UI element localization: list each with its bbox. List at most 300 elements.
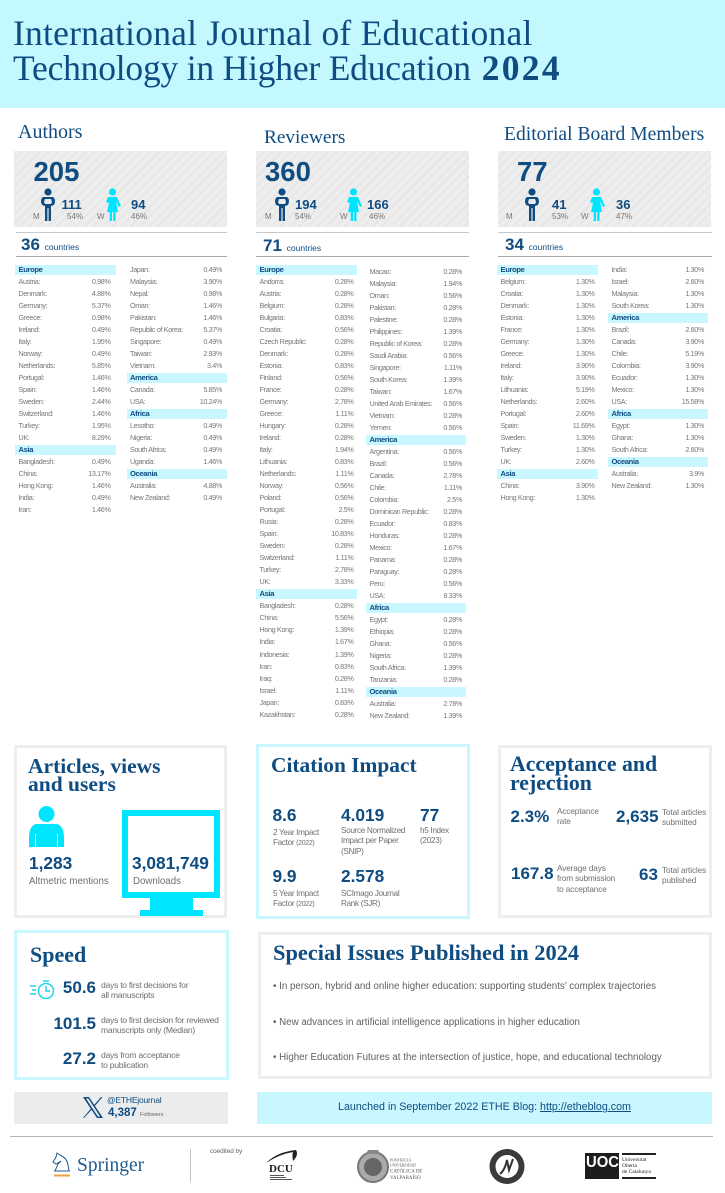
table: authors countries, column 2: 1.46% [203, 313, 222, 322]
days to acceptance label [557, 864, 615, 894]
articles published figure: 63 [639, 864, 658, 884]
table: authors countries, column 1: 8.29% [92, 433, 110, 442]
table: reviewers countries, column 1: 0.28% [335, 301, 354, 310]
table: editorial board countries, column 1: 1.30% [576, 313, 594, 322]
table: reviewers countries, column 2: 1.94% [443, 279, 462, 288]
table: editorial board countries, column 2: 15.58% [682, 397, 704, 406]
heading: editorial board members: Editorial Board Members [504, 124, 704, 145]
table: reviewers countries, column 1: Spain: [260, 529, 278, 538]
table: authors countries, column 2: Oceania [130, 469, 157, 478]
table: reviewers countries, column 2: 0.28% [443, 651, 462, 660]
icon: springer horse [52, 1152, 70, 1176]
snip label: (SNIP) [341, 847, 364, 856]
articles submitted label: Total articles [662, 808, 706, 817]
table: authors countries, column 1: Switzerland: [18, 409, 53, 418]
table: authors countries, column 1: China: [18, 469, 37, 478]
table: reviewers countries, column 2: Yemen: [370, 423, 392, 432]
icon: man [41, 188, 55, 221]
table: editorial board countries, column 1: Greece: [500, 349, 524, 358]
days to acceptance label: from submission [557, 874, 615, 883]
table: authors countries, column 2: Oman: [130, 301, 150, 310]
table: reviewers countries, column 2: Chile: [370, 483, 386, 492]
table: editorial board countries, column 1: 1.30% [576, 289, 594, 298]
table: reviewers countries, column 1: India: [260, 637, 275, 646]
table: reviewers countries, column 2: 0.56% [443, 459, 462, 468]
logo: pontificia universidad catolica de valparaiso: CATÓLICA DE [390, 1168, 422, 1174]
panel: editorial board totals [498, 151, 711, 227]
table: reviewers countries, column 1: Poland: [260, 493, 281, 502]
table: editorial board countries, column 1: 1.30% [576, 445, 594, 454]
table: editorial board countries, column 1: France: [500, 325, 522, 334]
table: reviewers countries, column 2: Africa [370, 603, 389, 612]
table: authors countries, column 1: India: [18, 493, 34, 502]
table: reviewers countries, column 1: Estonia: [260, 361, 283, 370]
table: reviewers countries, column 2: Honduras: [370, 531, 400, 540]
men share: 54% [295, 212, 311, 221]
reviewed manuscripts label: days to first decision for reviewed [101, 1014, 219, 1024]
table: reviewers countries, column 1: Turkey: [260, 565, 281, 574]
table: editorial board countries, column 1: China: [500, 481, 519, 490]
heading: authors: Authors [18, 121, 82, 143]
table: editorial board countries, column 2: 2.60% [685, 277, 704, 286]
table: authors countries, column 1: Denmark: [18, 289, 47, 298]
logo: universitat oberta de catalunya: Oberta [622, 1163, 638, 1169]
table: reviewers countries, column 1: Andorra: [260, 277, 284, 286]
days to acceptance figure: 167.8 [511, 864, 554, 882]
table: editorial board countries, column 2: Canada: [612, 337, 636, 346]
logo: pontificia universidad catolica de valparaiso: UNIVERSIDAD [390, 1164, 416, 1168]
articles submitted figure: 2,635 [616, 806, 659, 826]
table: editorial board countries, column 1: 3.90% [576, 361, 594, 370]
table: editorial board countries, column 1: 2.60% [576, 457, 594, 466]
table: reviewers countries, column 1: 0.28% [335, 421, 354, 430]
table: reviewers countries, column 1: 3.33% [335, 577, 354, 586]
table: reviewers countries, column 1: 0.28% [335, 601, 354, 610]
table: authors countries, column 1: UK: [18, 433, 29, 442]
logo: pontificia universidad catolica de valparaiso: VALPARAÍSO [390, 1175, 421, 1181]
table: authors countries, column 2: Vietnam: [130, 361, 155, 370]
heading: articles, views and users: Articles, views [28, 754, 161, 778]
table: reviewers countries, column 2: 0.28% [443, 555, 462, 564]
table: reviewers countries, column 1: 0.28% [335, 349, 354, 358]
h5 index label: h5 Index [420, 826, 449, 835]
table: reviewers countries, column 2: 1.67% [443, 387, 462, 396]
table: reviewers countries, column 2: 0.28% [443, 615, 462, 624]
icon: man [275, 188, 289, 221]
table: authors countries, column 1: 0.98% [92, 313, 110, 322]
table: editorial board countries, column 1: 3.90% [576, 481, 594, 490]
title: Technology in Higher Education 2024 [13, 48, 562, 88]
table: editorial board countries, column 2: South Africa: [612, 445, 648, 454]
table: reviewers countries, column 2: 0.28% [443, 567, 462, 576]
table: reviewers countries, column 1: 0.56% [335, 373, 354, 382]
table: editorial board countries, column 1: 2.60% [576, 397, 594, 406]
special issue 2: • New advances in artificial intelligence applications in higher education [273, 1017, 580, 1028]
table: reviewers countries, column 1: 0.56% [335, 325, 354, 334]
table: authors countries, column 1: 1.46% [92, 373, 110, 382]
2 year impact factor label: 2 Year Impact [273, 828, 319, 836]
table: editorial board countries, column 1: UK: [500, 457, 511, 466]
table: authors countries, column 2: Africa [130, 409, 149, 418]
table: authors countries, column 1: Italy: [18, 337, 32, 346]
icon: woman [106, 188, 121, 221]
table: reviewers countries, column 2: 1.11% [444, 483, 462, 492]
table: reviewers countries, column 2: Brazil: [370, 459, 387, 468]
table: authors countries, column 1: Germany: [18, 301, 47, 310]
table: editorial board countries, column 2: 2.60% [685, 325, 704, 334]
first decision label: days to first decisions for [101, 980, 188, 990]
table: authors countries, column 1: 2.44% [92, 397, 110, 406]
table: authors countries, column 1: 1.95% [92, 337, 110, 346]
table: reviewers countries, column 1: 0.83% [335, 662, 354, 671]
table: reviewers countries, column 1: Iraq: [260, 674, 272, 683]
table: reviewers countries, column 2: Macao: [370, 266, 391, 276]
table: editorial board countries, column 1: Asia [500, 469, 515, 478]
table: reviewers countries, column 2: Ghana: [370, 639, 391, 648]
table: editorial board countries, column 1: 11.69% [573, 421, 594, 430]
table: reviewers countries, column 1: Denmark: [260, 349, 288, 358]
panel: blog link: Launched in September 2022 ETHE Blog: http://etheblog.com [338, 1101, 631, 1113]
icon: person [29, 806, 64, 847]
table: editorial board countries, column 1: 1.30% [576, 493, 594, 502]
table: reviewers countries, column 1: Greece: [260, 409, 283, 418]
title: International Journal of Educational [13, 12, 533, 52]
total editorial board members: 77 [517, 156, 548, 187]
table: authors countries, column 2: America [130, 373, 158, 382]
table: editorial board countries, column 1: Sweden: [500, 433, 526, 442]
first decision label [101, 980, 188, 1000]
table: editorial board countries, column 1: 5.19% [576, 385, 594, 394]
table: editorial board countries, column 2: 1.30% [685, 433, 704, 442]
table: reviewers countries, column 2: Oman: [370, 291, 389, 300]
5 year impact factor label [273, 889, 320, 908]
table: authors countries, column 2: 1.46% [203, 301, 222, 310]
table: reviewers countries, column 1: UK: [260, 577, 270, 586]
table: editorial board countries, column 2: Israel: [612, 277, 629, 286]
table: reviewers countries, column 2: 2.78% [443, 471, 462, 480]
table: reviewers countries, column 2: Singapore: [370, 363, 401, 372]
table: reviewers countries, column 2: Pakistan: [370, 303, 396, 312]
table: authors countries, column 1: 0.49% [92, 457, 110, 466]
table: reviewers countries, column 1: Italy: [260, 445, 273, 454]
men count: 41 [552, 196, 566, 212]
snip figure: 4.019 [341, 804, 384, 824]
follower count: 4,387 Followers [108, 1107, 164, 1119]
table: editorial board countries, column 2: 2.60% [685, 445, 704, 454]
downloads figure: 3,081,749 [132, 853, 209, 873]
table: authors countries, column 2: USA: [130, 397, 145, 406]
table: editorial board countries, column 1: Estonia: [500, 313, 524, 322]
table: reviewers countries, column 1: 0.28% [335, 277, 354, 286]
logo: universitat oberta de catalunya [585, 1153, 657, 1180]
table: reviewers countries, column 2: 0.28% [443, 339, 462, 348]
table: authors countries, column 1: 0.49% [92, 493, 110, 502]
table: reviewers countries, column 2: 0.56% [443, 639, 462, 648]
table: reviewers countries, column 2: 0.83% [443, 519, 462, 528]
header banner [0, 0, 725, 108]
table: editorial board countries, column 1: 1.30% [576, 301, 594, 310]
table: reviewers countries, column 1: 0.28% [335, 674, 354, 683]
table: authors countries, column 2: 5.85% [203, 385, 222, 394]
table: reviewers countries, column 1: Germany: [260, 397, 288, 406]
first decision figure: 50.6 [63, 978, 96, 997]
table: reviewers countries, column 2: 1.39% [443, 375, 462, 384]
heading: special issues: Special Issues Published in 2024 [273, 940, 579, 965]
editorial board country count: 34 countries [505, 235, 563, 254]
table: authors countries, column 1: Portugal: [18, 373, 44, 382]
table: editorial board countries, column 2: USA: [612, 397, 627, 406]
table: reviewers countries, column 1: 10.83% [331, 529, 354, 538]
panel: authors totals [14, 151, 227, 227]
table: authors countries, column 2: 4.88% [203, 481, 222, 490]
table: reviewers countries, column 2: Nigeria: [370, 651, 391, 660]
h5 index label [420, 826, 449, 845]
snip label [341, 826, 405, 856]
men count: 111 [62, 196, 82, 212]
table: editorial board countries, column 2: Colombia: [612, 361, 641, 370]
table: reviewers countries, column 1: 1.94% [335, 445, 354, 454]
table: authors countries, column 2: Malaysia: [130, 277, 157, 286]
table: authors countries, column 1: Europe [18, 265, 43, 274]
table: editorial board countries, column 2: 3.9% [689, 469, 704, 478]
table: reviewers countries, column 1: Indonesia: [260, 650, 289, 658]
panel: articles, views and users [14, 745, 227, 918]
table: editorial board countries, column 1: Belgium: [500, 277, 526, 286]
table: editorial board countries, column 1: Croatia: [500, 289, 523, 298]
table: reviewers countries, column 2: Republic of Korea: [370, 339, 422, 348]
table: authors countries, column 1: Hong Kong: [18, 481, 53, 490]
table: reviewers countries, column 1: 1.11% [335, 469, 354, 478]
table: editorial board countries, column 2: Mexico: [612, 385, 634, 394]
table: editorial board countries, column 1: Europe [500, 265, 525, 274]
men label: M [33, 212, 40, 221]
table: reviewers countries, column 2: America [370, 435, 397, 444]
5 year impact factor label: 5 Year Impact [273, 889, 319, 898]
heading: speed: Speed [30, 942, 86, 967]
table: authors countries, column 2: 0.49% [203, 337, 222, 346]
logo: dcu [266, 1150, 297, 1180]
table: editorial board countries, column 2: 1.30% [685, 301, 704, 310]
logo: universitat oberta de catalunya: Universitat [622, 1157, 647, 1163]
acceptance rate figure: 2.3% [510, 806, 549, 826]
days to acceptance label: to acceptance [557, 885, 607, 894]
table: editorial board countries, column 2: 1.30% [685, 481, 704, 490]
sjr label: SCImago Journal [341, 889, 399, 898]
table: editorial board countries, column 2: South Korea: [612, 301, 649, 310]
table: editorial board countries, column 2: America [612, 313, 639, 322]
table: reviewers countries, column 2: 0.28% [443, 627, 462, 636]
table: reviewers countries, column 2: 0.56% [443, 351, 462, 360]
table: authors countries, column 1: 0.49% [92, 349, 110, 358]
table: reviewers countries, column 2: 0.56% [443, 291, 462, 300]
table: reviewers countries, column 2: 0.28% [443, 507, 462, 516]
2 year impact factor label: Factor (2022) [273, 838, 314, 847]
table: reviewers countries, column 2: 8.33% [443, 591, 462, 600]
table: editorial board countries, column 2: 1.30% [685, 265, 704, 274]
acceptance to publication figure: 27.2 [63, 1049, 96, 1068]
table: reviewers countries, column 2: 0.28% [443, 411, 462, 420]
table: reviewers countries, column 1: Finland: [260, 373, 282, 382]
table: reviewers countries, column 2: Saudi Arabia: [370, 351, 408, 360]
table: reviewers countries, column 2: 1.39% [443, 663, 462, 672]
table: authors countries, column 1: Netherlands: [18, 361, 55, 370]
table: reviewers countries, column 1: 1.67% [335, 637, 354, 646]
table: reviewers countries, column 1: 0.83% [335, 361, 354, 370]
women label: W [97, 212, 105, 221]
men label: M [265, 212, 272, 221]
table: reviewers countries, column 2: 0.56% [443, 399, 462, 408]
table: authors countries, column 1: 5.85% [92, 361, 110, 370]
men label: M [506, 212, 513, 221]
men count: 194 [295, 196, 317, 212]
altmetric mentions label: Altmetric mentions [29, 876, 109, 887]
2 year impact factor figure: 8.6 [272, 804, 297, 824]
table: reviewers countries, column 1: Lithuania: [260, 457, 287, 466]
total reviewers: 360 [265, 156, 311, 187]
table: reviewers countries, column 1: Israel: [260, 686, 277, 695]
table: authors countries, column 1: Iran: [18, 505, 31, 514]
table: reviewers countries, column 1: Hungary: [260, 421, 286, 430]
table: reviewers countries, column 1: Japan: [260, 698, 279, 707]
table: editorial board countries, column 1: Denmark: [500, 301, 529, 310]
table: reviewers countries, column 2: New Zealand: [370, 711, 410, 720]
articles published label: published [662, 876, 696, 885]
table: reviewers countries, column 2: Malaysia: [370, 279, 397, 288]
snip label: Impact per Paper [341, 836, 399, 845]
table: reviewers countries, column 1: Croatia: [260, 325, 282, 334]
table: authors countries, column 1: 1.46% [92, 385, 110, 394]
special issue 3: • Higher Education Futures at the intersection of justice, hope, and educational technology [273, 1052, 662, 1063]
authors country count: 36 countries [21, 235, 79, 254]
table: reviewers countries, column 2: Peru: [370, 579, 385, 588]
table: authors countries, column 1: 1.46% [92, 409, 110, 418]
icon: woman [347, 188, 362, 221]
table: editorial board countries, column 1: Germany: [500, 337, 529, 346]
table: authors countries, column 2: Japan: [130, 265, 149, 274]
logo: pontificia universidad catolica de valparaiso: PONTIFICIA [390, 1158, 411, 1162]
acceptance rate label: Acceptance [557, 807, 599, 816]
table: reviewers countries, column 1: Asia [260, 589, 274, 598]
table: authors countries, column 2: 0.49% [203, 421, 222, 430]
days to acceptance label: Average days [557, 864, 606, 873]
table: reviewers countries, column 2: 0.28% [443, 675, 462, 684]
table: reviewers countries, column 1: 1.11% [335, 686, 354, 695]
table: authors countries, column 2: South Africa: [130, 445, 166, 454]
2 year impact factor label [273, 828, 320, 847]
coedited by label: coedited by [210, 1148, 242, 1155]
articles published label [662, 866, 706, 885]
table: reviewers countries, column 2: Argentina: [370, 447, 399, 456]
table: reviewers countries, column 2: Ecuador: [370, 519, 395, 528]
panel: citation impact [256, 744, 470, 919]
logo: universitat oberta de catalunya: de Catalunya [622, 1169, 651, 1175]
articles submitted label [662, 808, 706, 827]
table: editorial board countries, column 1 [497, 265, 598, 502]
table: editorial board countries, column 2: 1.30% [685, 289, 704, 298]
table: editorial board countries, column 2: Oceania [612, 457, 639, 466]
panel: speed [14, 930, 229, 1080]
acceptance rate label [557, 807, 599, 826]
table: reviewers countries, column 2: Paraguay: [370, 567, 399, 576]
table: authors countries, column 1: Spain: [18, 385, 37, 394]
table: editorial board countries, column 2: 1.30% [685, 373, 704, 382]
table: authors countries, column 1: 0.98% [92, 277, 110, 286]
table: reviewers countries, column 1: 0.83% [335, 313, 354, 322]
table: authors countries, column 2: 5.37% [203, 325, 222, 334]
table: reviewers countries, column 1: 5.56% [335, 613, 354, 622]
table: reviewers countries, column 2: Taiwan: [370, 387, 391, 396]
table: reviewers countries, column 2: United Arab Emirates: [370, 399, 432, 408]
table: reviewers countries, column 2: Ethiopia: [370, 627, 394, 636]
reviewed manuscripts label: manuscripts only (Median) [101, 1025, 195, 1035]
table: editorial board countries, column 2: Egypt: [612, 421, 630, 430]
table: reviewers countries, column 2 [366, 266, 466, 720]
table: authors countries, column 1: 1.46% [92, 481, 110, 490]
table: reviewers countries, column 1: 0.28% [335, 385, 354, 394]
table: authors countries, column 1: Norway: [18, 349, 42, 358]
women count: 166 [367, 196, 389, 212]
heading: acceptance and rejection [510, 752, 657, 795]
table: authors countries, column 2: 3.4% [207, 361, 222, 370]
table: reviewers countries, column 1: Europe [260, 265, 284, 274]
table: editorial board countries, column 2: India: [612, 265, 627, 274]
acceptance to publication label [101, 1050, 180, 1070]
acceptance to publication label: to publication [101, 1060, 148, 1070]
table: reviewers countries, column 1: 1.39% [335, 650, 354, 658]
table: editorial board countries, column 1: 2.60% [576, 409, 594, 418]
table: reviewers countries, column 1: Ireland: [260, 433, 281, 442]
reviewed manuscripts figure: 101.5 [53, 1014, 96, 1033]
table: reviewers countries, column 2: 0.28% [443, 303, 462, 312]
table: editorial board countries, column 2: Ghana: [612, 433, 633, 442]
table: editorial board countries, column 1: Netherlands: [500, 397, 537, 406]
table: authors countries, column 2: 0.49% [203, 265, 222, 274]
5 year impact factor label: Factor (2022) [273, 899, 314, 908]
icon: stopwatch [30, 980, 54, 1000]
table: authors countries, column 2: Canada: [130, 385, 155, 394]
table: editorial board countries, column 1: 1.30% [576, 349, 594, 358]
table: editorial board countries, column 2: Ecuador: [612, 373, 637, 382]
table: reviewers countries, column 1: 2.78% [335, 565, 354, 574]
panel: reviewers totals [256, 151, 469, 227]
table: authors countries, column 1: 4.88% [92, 289, 110, 298]
table: reviewers countries, column 1: Bangladesh: [260, 601, 296, 610]
table: reviewers countries, column 2: South Africa: [370, 663, 406, 672]
table: reviewers countries, column 2: Panama: [370, 555, 396, 564]
women share: 46% [131, 212, 147, 221]
x handle: @ETHEjournal [107, 1095, 161, 1105]
table: reviewers countries, column 1: 1.11% [335, 409, 354, 418]
women count: 36 [616, 196, 630, 212]
table: authors countries, column 2: 0.49% [203, 433, 222, 442]
table: reviewers countries, column 1: 2.78% [335, 397, 354, 406]
table: editorial board countries, column 1: 1.30% [576, 433, 594, 442]
table: reviewers countries, column 1: 0.28% [335, 710, 354, 719]
h5 index label: (2023) [420, 836, 442, 845]
table: editorial board countries, column 2: Africa [612, 409, 631, 418]
table: reviewers countries, column 1: 1.11% [335, 553, 354, 562]
table: authors countries, column 1: Ireland: [18, 325, 40, 334]
table: reviewers countries, column 2: Tanzania: [370, 675, 397, 684]
table: authors countries, column 2: Nigeria: [130, 433, 152, 442]
panel: blog link [257, 1092, 712, 1124]
table: reviewers countries, column 2: 0.56% [443, 579, 462, 588]
table: reviewers countries, column 2: Oceania [370, 687, 397, 696]
sjr label [341, 889, 400, 908]
table: authors countries, column 2: 1.46% [203, 457, 222, 466]
h5 index figure: 77 [420, 804, 439, 824]
logo: circular university seal [490, 1149, 524, 1184]
